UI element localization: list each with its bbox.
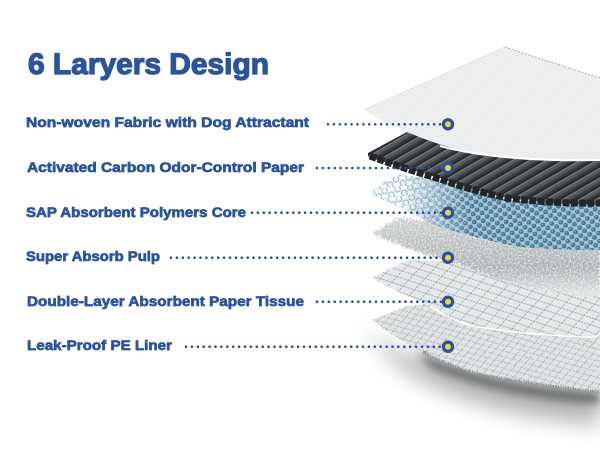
layer 3: SAP absorbent polymers core	[370, 174, 600, 250]
title: 6 Laryers Design	[28, 48, 269, 81]
label text: Activated Carbon Odor-Control Paper	[27, 159, 305, 175]
marker	[442, 206, 454, 219]
layer 2: activated carbon paper	[368, 132, 600, 205]
dotted leader	[252, 211, 442, 214]
marker	[442, 296, 454, 308]
label row 3: SAP core	[26, 204, 454, 220]
layer 4: super absorb pulp	[372, 218, 600, 297]
marker	[442, 340, 454, 353]
blue hex core	[403, 176, 600, 250]
light hex fringe	[370, 174, 500, 238]
dotted leader	[186, 345, 442, 348]
dotted leader	[328, 123, 442, 126]
rib ends	[370, 156, 600, 203]
layer 1: non-woven fabric	[364, 47, 600, 161]
label text: Non-woven Fabric with Dog Attractant	[26, 114, 309, 130]
layer 5: double-layer absorbent paper tissue	[372, 260, 600, 338]
marker	[442, 162, 454, 174]
dotted leader	[317, 300, 442, 303]
marker	[442, 118, 454, 130]
layer stack illustration	[362, 47, 600, 425]
label row 6: leak-proof liner	[27, 337, 454, 353]
dotted leader	[317, 167, 442, 169]
label row 1: non-woven fabric	[26, 114, 454, 130]
floor shadow	[362, 328, 600, 425]
label text: Leak-Proof PE Liner	[27, 337, 173, 353]
label text: Super Absorb Pulp	[26, 248, 160, 264]
label row 5: double-layer tissue	[27, 293, 454, 309]
label text: Double-Layer Absorbent Paper Tissue	[27, 293, 304, 309]
label text: SAP Absorbent Polymers Core	[26, 204, 246, 220]
dotted leader	[171, 256, 442, 259]
label row 4: super absorb pulp	[26, 248, 454, 264]
marker	[442, 252, 454, 264]
label row 2: activated carbon	[27, 159, 454, 175]
layer 6: leak-proof PE liner	[372, 300, 600, 392]
